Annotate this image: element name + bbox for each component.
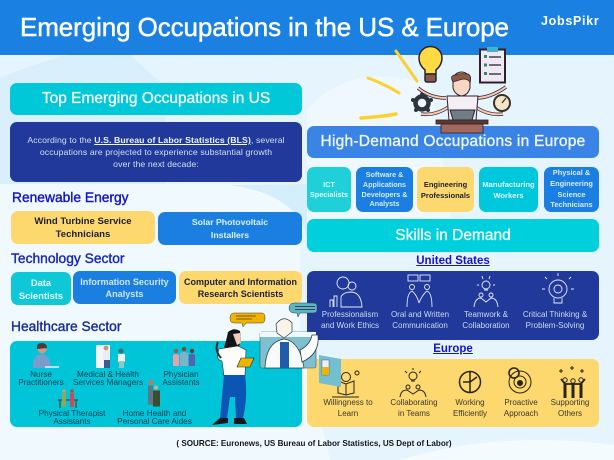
text: healthcare roles: Physician	[163, 370, 199, 379]
card: ICT: Specialists	[310, 190, 348, 198]
icons: US skills	[330, 273, 574, 308]
card: computer research	[179, 271, 302, 304]
heading: Europe: Europe	[433, 343, 473, 355]
panel: skills heading: Skills in Demand	[395, 226, 511, 244]
icon: home health aide	[148, 380, 160, 406]
panel: healthcare	[10, 341, 302, 427]
card: ICT	[307, 167, 351, 212]
text: healthcare roles: Home Health and	[123, 409, 186, 418]
heading: healthcare sector: Healthcare Sector	[11, 319, 121, 334]
card: wind turbine: Technicians	[56, 228, 110, 240]
panel: high-demand Europe heading: High-Demand Occupations in Europe	[320, 133, 586, 150]
card: manufacturing	[479, 167, 538, 212]
card: software: Applications	[363, 180, 406, 189]
card: data scientists: Data	[31, 276, 51, 288]
card: manufacturing: Manufacturing	[482, 180, 535, 188]
panel: Europe skills	[307, 359, 599, 427]
card: information security: Analysts	[106, 288, 143, 298]
woman	[212, 329, 254, 425]
text: US skills: Critical Thinking &	[523, 310, 587, 319]
speech bubble teal	[289, 303, 317, 317]
panel: US skills	[307, 271, 599, 340]
icon: physician assistants	[173, 346, 195, 366]
heading: technology sector: Technology Sector	[11, 251, 125, 266]
person	[418, 72, 506, 120]
icon: medical managers	[96, 345, 125, 368]
source note: ( SOURCE: Euronews, US Bureau of Labor Statistics, US Dept of Labor)	[176, 439, 452, 448]
text: US skills: Teamwork &	[464, 310, 508, 319]
card: physical science: Physical &	[553, 168, 590, 177]
text: US skills: Communication	[392, 321, 448, 330]
icon: medicine card	[319, 355, 341, 387]
icon: nurse	[32, 343, 59, 368]
heading: renewable energy: Renewable Energy	[12, 190, 129, 205]
heading: United States: United States	[416, 255, 490, 267]
doctor arm	[300, 335, 318, 362]
text: healthcare roles: Services Managers	[73, 378, 143, 387]
panel: top emerging occupations heading: Top Emerging Occupations in US	[42, 90, 270, 107]
text: Europe skills: Learn	[338, 409, 358, 418]
card: software: Analysts	[370, 199, 399, 208]
panel: BLS intro	[10, 122, 302, 182]
card: software	[356, 167, 413, 212]
text: Europe skills: Supporting	[551, 398, 589, 407]
text: Europe skills: Approach	[504, 409, 538, 418]
text: healthcare roles: Medical & Health	[77, 370, 139, 379]
text: US skills: Problem-Solving	[526, 321, 584, 330]
card: solar	[158, 212, 302, 245]
text: Europe skills: Efficiently	[453, 409, 487, 418]
text: healthcare roles: Nurse	[30, 370, 52, 379]
card: physical science: Engineering	[550, 179, 593, 188]
panel: top emerging occupations heading	[10, 83, 302, 115]
text: healthcare roles: Physical Therapist	[39, 409, 105, 418]
text: Europe skills: in Teams	[398, 409, 430, 418]
card: solar: Installers	[211, 230, 249, 240]
logo: JobsPikr: JobsPikr	[541, 14, 599, 28]
text: US skills: Professionalism	[322, 310, 378, 319]
card: computer research: Computer and Information	[184, 276, 297, 286]
card: data scientists: Scientists	[19, 290, 63, 300]
desk	[436, 120, 488, 133]
icon: gauge clock	[494, 95, 510, 111]
icons: Europe skills	[332, 366, 586, 398]
card: engineering: Professionals	[421, 190, 470, 200]
card: engineering	[417, 167, 474, 212]
card: engineering: Engineering	[424, 180, 467, 188]
card: wind turbine	[11, 211, 155, 244]
illustration: woman and doctor on video call	[212, 302, 319, 425]
card: solar: Solar Photovoltaic	[192, 216, 268, 226]
text: healthcare roles: Personal Care Aides	[117, 417, 192, 426]
icon: light rays	[361, 51, 417, 118]
card: manufacturing: Workers	[493, 190, 524, 200]
text: healthcare roles: Assistants	[162, 378, 200, 387]
text: Europe skills: Willingness to	[323, 398, 373, 407]
panel: BLS intro: occupations are projected to experience substantial growth	[40, 147, 272, 157]
card: data scientists	[11, 272, 71, 305]
icon: light bulb	[419, 47, 442, 82]
text: Europe skills: Collaborating	[390, 398, 438, 407]
header band	[0, 0, 614, 55]
icon: gear	[411, 92, 433, 112]
panel: skills heading	[307, 219, 599, 252]
card: information security	[73, 271, 176, 304]
text: healthcare roles	[18, 370, 200, 426]
text: healthcare roles: Practitioners	[18, 378, 64, 387]
card: computer research: Research Scientists	[198, 288, 283, 298]
panel: high-demand Europe heading	[307, 126, 599, 158]
icon: physical therapist	[58, 389, 78, 408]
card: information security: Information Security	[80, 276, 169, 286]
text: US skills: Collaboration	[462, 321, 510, 330]
text: Europe skills: Working	[455, 398, 485, 407]
card: software: Developers &	[362, 190, 407, 198]
panel: BLS intro: over the next decade:	[113, 159, 199, 169]
card: software: Software &	[366, 170, 403, 179]
text: US skills: and Work Ethics	[321, 321, 379, 330]
text: US skills	[321, 310, 588, 330]
illustration: multitasking worker	[359, 46, 511, 134]
card: physical science: Science	[558, 190, 585, 198]
card: physical science	[544, 167, 599, 212]
title: Emerging Occupations in the US & Europe	[20, 12, 509, 42]
text: Europe skills: Proactive	[504, 398, 538, 407]
card: wind turbine: Wind Turbine Service	[34, 216, 132, 226]
panel: BLS intro: According to the U.S. Bureau of Labor Statistics (BLS), several	[27, 135, 285, 145]
card: physical science: Technicians	[550, 200, 593, 209]
speech bubble yellow	[230, 313, 265, 327]
text: Europe skills: Others	[558, 409, 582, 418]
card: ICT: ICT	[323, 180, 335, 188]
video window	[260, 319, 316, 368]
text: healthcare roles: Assistants	[53, 417, 91, 426]
icon: clipboard	[480, 47, 505, 82]
text: US skills: Oral and Written	[391, 310, 449, 319]
